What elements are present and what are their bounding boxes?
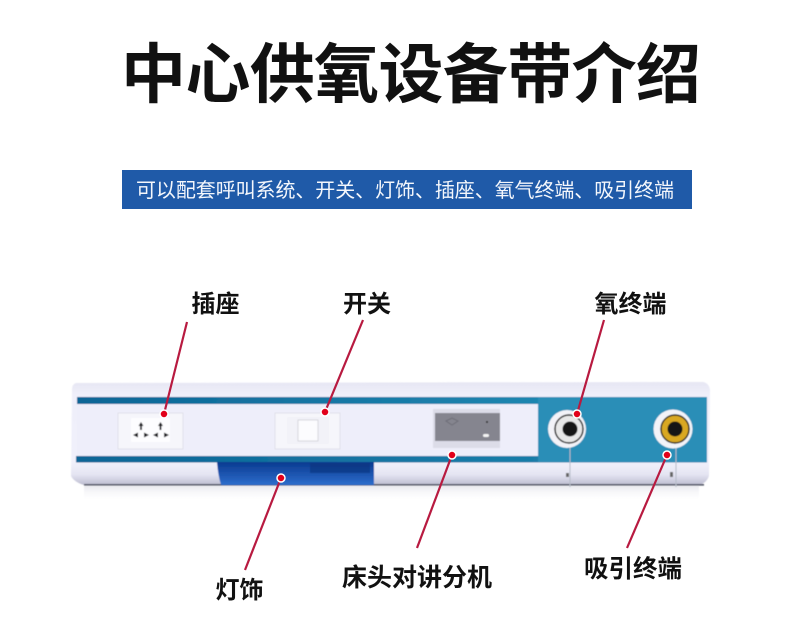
upper stripe bbox=[77, 397, 538, 404]
intercom bbox=[433, 409, 500, 448]
light trim bbox=[217, 462, 374, 485]
callout: socket: 插座 bbox=[192, 290, 240, 318]
callout: light trim bbox=[216, 474, 285, 604]
callout: light trim: 灯饰 bbox=[216, 577, 264, 604]
rail reflection bbox=[84, 486, 699, 502]
oxygen outlet bbox=[548, 410, 586, 487]
callout: suction outlet: 吸引终端 bbox=[584, 555, 682, 583]
teal gas panel bbox=[538, 397, 707, 462]
callout: socket bbox=[160, 290, 240, 418]
callout: oxygen outlet: 氧终端 bbox=[594, 291, 666, 318]
callout: switch: 开关 bbox=[343, 291, 391, 318]
socket bbox=[118, 413, 183, 449]
callout: switch bbox=[321, 291, 391, 416]
rail bottom edge bbox=[84, 484, 704, 486]
banner: 可以配套呼叫系统、开关、灯饰、插座、氧气终端、吸引终端 bbox=[136, 179, 674, 202]
panel: equipment rail bbox=[71, 382, 710, 502]
callout: bedside intercom bbox=[342, 451, 492, 592]
suction outlet bbox=[654, 410, 692, 487]
switch bbox=[275, 413, 340, 449]
banner bbox=[122, 170, 692, 209]
lower stripe bbox=[76, 456, 707, 462]
callout: suction outlet bbox=[584, 451, 682, 583]
callout: bedside intercom: 床头对讲分机 bbox=[342, 564, 492, 592]
rail body bbox=[71, 382, 710, 485]
title: 中心供氧设备带介绍 bbox=[121, 38, 701, 111]
callout: oxygen outlet bbox=[573, 291, 666, 418]
white centre panel bbox=[77, 404, 538, 456]
